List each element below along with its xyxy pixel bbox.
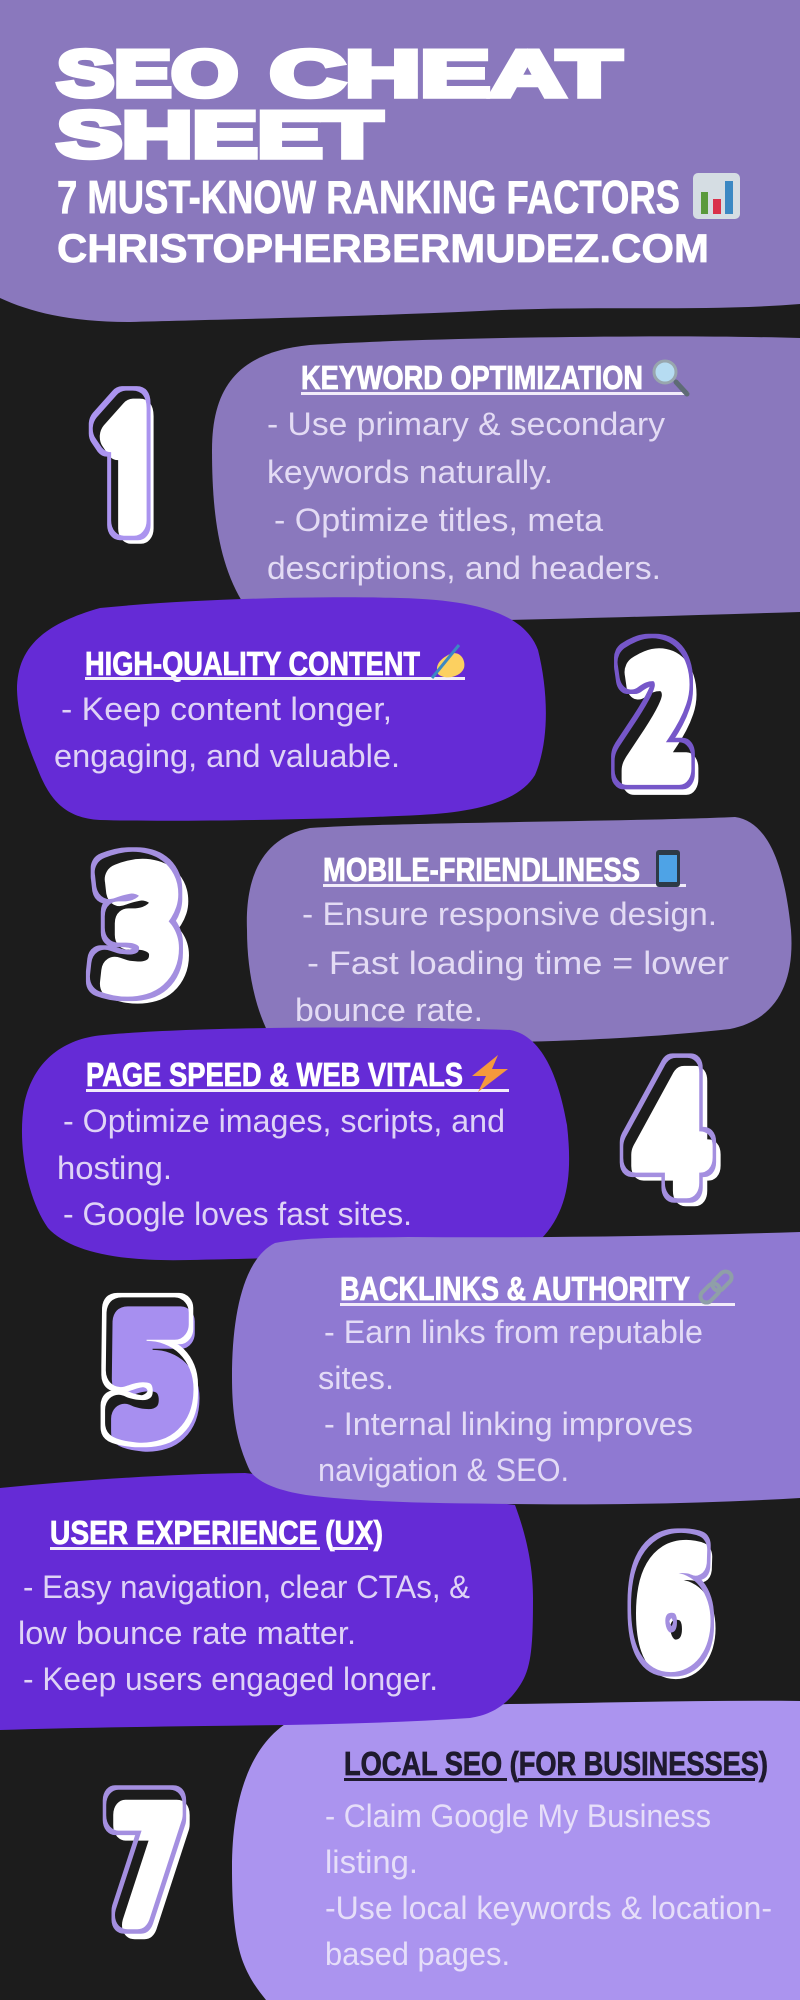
heading: HIGH-QUALITY CONTENT [85, 645, 420, 682]
body: - Fast loading time = lower [307, 945, 729, 981]
underline [323, 884, 686, 887]
number 2: 2 [625, 650, 699, 804]
body: - Keep content longer, [61, 691, 392, 727]
number 1: 1 [94, 400, 172, 554]
body [18, 1569, 470, 1697]
body: based pages. [325, 1936, 510, 1972]
body [325, 1798, 772, 1972]
body [318, 1314, 703, 1488]
number 7: 7 [116, 1801, 188, 1949]
body: keywords naturally. [267, 454, 553, 490]
title: SEO [57, 37, 238, 110]
body: bounce rate. [295, 992, 483, 1028]
body: - Optimize titles, meta [274, 502, 603, 538]
body: - Use primary & secondary [267, 406, 665, 442]
body: sites. [318, 1360, 394, 1396]
underline [50, 1547, 368, 1550]
body: - Claim Google My Business [325, 1798, 711, 1834]
title: SHEET [57, 98, 382, 171]
body: - Google loves fast sites. [63, 1196, 412, 1232]
panel: page speed and web vitals [22, 1028, 569, 1260]
header panel [0, 0, 800, 322]
body [295, 896, 729, 1028]
body [57, 1103, 505, 1232]
panel: user experience [0, 1473, 533, 1730]
number 6: 6 [634, 1534, 706, 1680]
number 3: 3 [104, 861, 188, 1012]
underline [301, 392, 689, 395]
underline [340, 1303, 735, 1306]
heading: USER EXPERIENCE (UX) [50, 1514, 383, 1551]
number 5: 5 [103, 1298, 191, 1452]
body: hosting. [57, 1150, 172, 1186]
icon: chain link [698, 1269, 734, 1305]
body: - Keep users engaged longer. [23, 1661, 438, 1697]
body: -Use local keywords & location- [325, 1890, 772, 1926]
title: CHEAT [270, 37, 621, 110]
number 4: 4 [630, 1058, 706, 1208]
panel: keyword optimization [212, 336, 800, 622]
underline [344, 1778, 755, 1781]
number 2: 2 [618, 640, 692, 794]
body: - Earn links from reputable [324, 1314, 703, 1350]
body: navigation & SEO. [318, 1452, 569, 1488]
body [267, 406, 665, 586]
underline [85, 677, 465, 680]
website: CHRISTOPHERBERMUDEZ.COM [57, 227, 709, 271]
number 1: 1 [87, 392, 165, 546]
icon: bar chart [693, 173, 740, 219]
body: - Optimize images, scripts, and [63, 1103, 505, 1139]
underline [86, 1089, 509, 1092]
title [57, 37, 621, 171]
body: - Easy navigation, clear CTAs, & [23, 1569, 470, 1605]
heading: BACKLINKS & AUTHORITY [340, 1270, 690, 1307]
heading: MOBILE-FRIENDLINESS [323, 851, 640, 888]
icon: magnifier [654, 361, 687, 394]
number 3: 3 [94, 854, 178, 1005]
body: - Internal linking improves [324, 1406, 693, 1442]
icon: writing hand [432, 645, 464, 678]
number 7: 7 [109, 1791, 181, 1939]
panel: high-quality content [17, 597, 546, 821]
icon: lightning bolt [472, 1055, 508, 1092]
icon: phone [656, 850, 680, 887]
body: descriptions, and headers. [267, 550, 661, 586]
body [54, 691, 400, 774]
body: engaging, and valuable. [54, 738, 400, 774]
body: low bounce rate matter. [18, 1615, 356, 1651]
number 6: 6 [639, 1541, 711, 1687]
number 4: 4 [638, 1066, 714, 1216]
body: listing. [325, 1844, 418, 1880]
heading: PAGE SPEED & WEB VITALS [86, 1056, 463, 1093]
panel: backlinks and authority [232, 1232, 800, 1504]
panel: local seo [232, 1701, 800, 2000]
panel: mobile-friendliness [247, 817, 791, 1042]
heading: KEYWORD OPTIMIZATION [301, 359, 643, 396]
body: - Ensure responsive design. [302, 896, 717, 932]
number 5: 5 [109, 1307, 197, 1461]
